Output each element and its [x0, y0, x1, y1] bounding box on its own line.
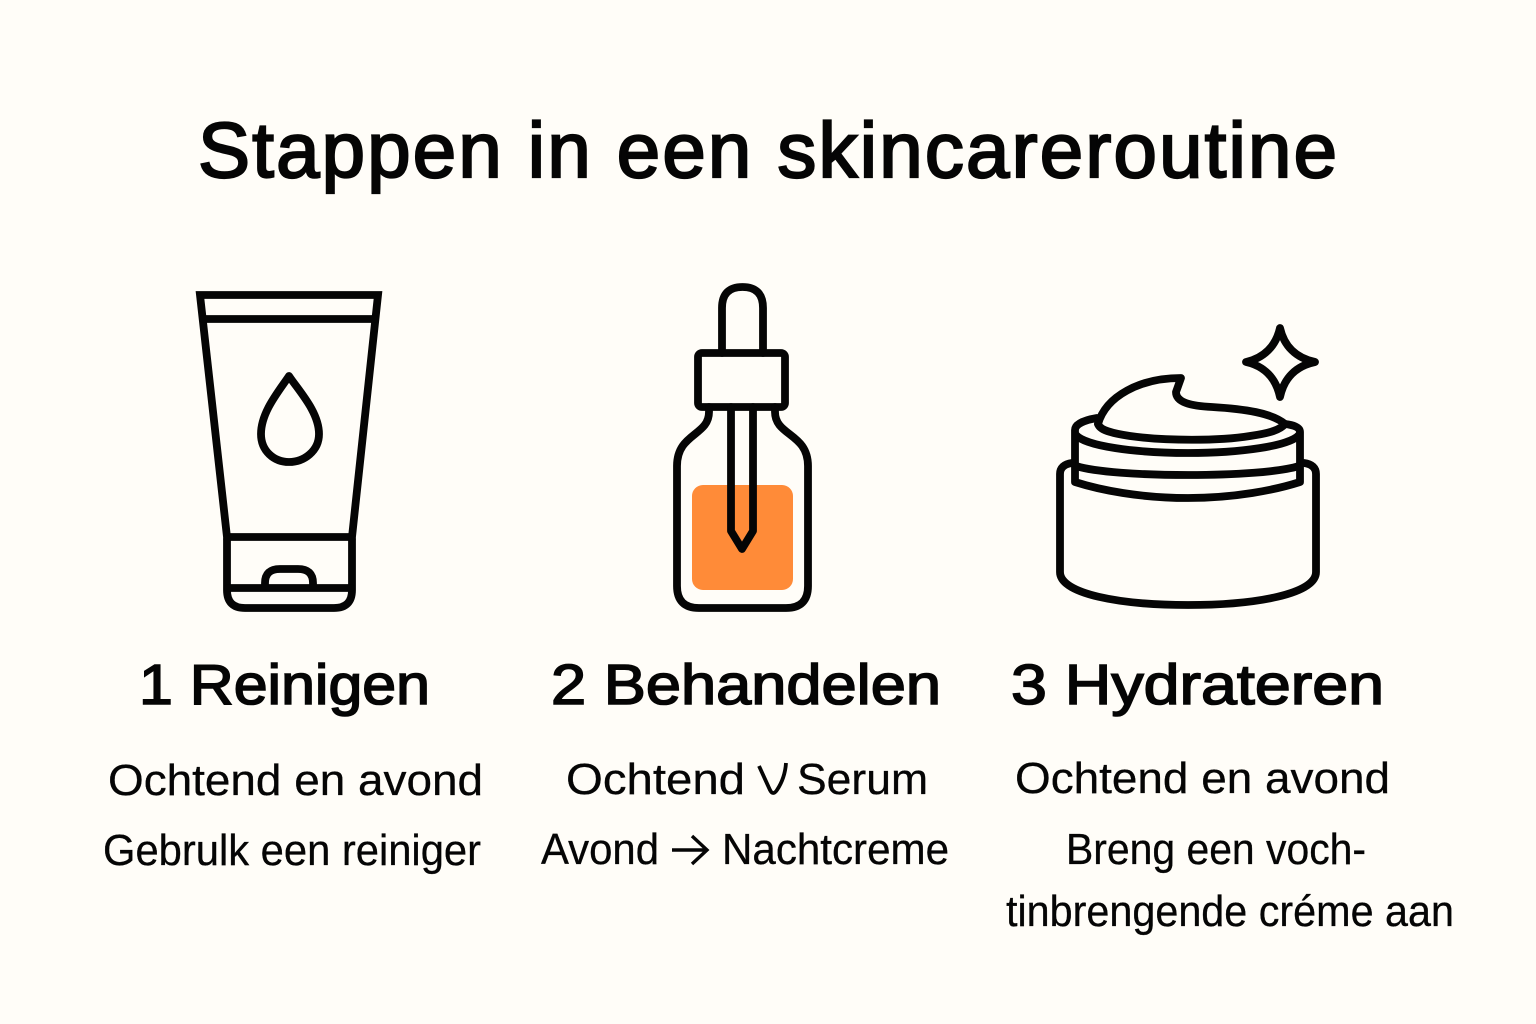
heading: step 2: 2 Behandelen: [551, 653, 941, 717]
icon: cleanser tube: [200, 295, 378, 608]
panel: step 3 moisturize: [1006, 328, 1454, 936]
text: night cream: Nachtcreme: [722, 825, 949, 874]
text: step 3 timing: Ochtend en avond: [1015, 754, 1390, 803]
icon: arrow: [672, 836, 707, 864]
panel: step 2 treat: [541, 287, 949, 874]
icon: water drop: [261, 376, 319, 462]
heading: step 3: 3 Hydrateren: [1011, 653, 1384, 717]
text: morning serum: Ochtend: [566, 755, 745, 804]
panel: step 1 cleanse: [103, 295, 483, 875]
text: step 3 instruction: Breng een voch-: [1066, 825, 1366, 874]
title: Stappen in een skincareroutine: [198, 106, 1337, 194]
serum fill: [692, 485, 793, 590]
icon: check mark: [759, 763, 786, 793]
text: serum: Serum: [797, 755, 928, 804]
icon: serum dropper bottle: [677, 287, 808, 608]
icon: cream jar: [1060, 328, 1316, 605]
text: step 1 timing: Ochtend en avond: [108, 756, 483, 805]
text: step 3 instruction: tinbrengende créme aan: [1006, 887, 1454, 936]
text: evening: Avond: [541, 825, 659, 874]
icon: sparkle: [1246, 328, 1315, 397]
heading: step 1: 1 Reinigen: [139, 653, 430, 717]
text: step 1 instruction: Gebrulk een reiniger: [103, 826, 481, 875]
text: step 3 instruction: [1006, 825, 1454, 936]
